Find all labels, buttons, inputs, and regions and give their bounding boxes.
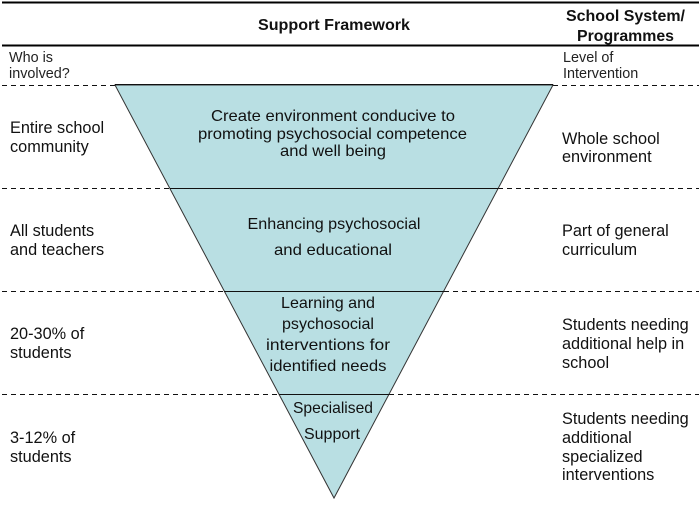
right label: Students needing additional specialized interventions: Students needing [562,410,689,428]
tier 1 text: promoting psychosocial competence [198,126,467,143]
column label: Level of Intervention [563,50,638,82]
right label: Students needing additional help in school: Students needing [562,316,689,334]
heading: School System/Programmes: School System/ [566,8,686,25]
tier 2 text: and educational [274,242,392,259]
tier 3 text [266,295,391,375]
tier 3 text: Learning and [281,295,375,312]
column label: Who is involved? [9,50,70,82]
tier 4 text [293,400,373,443]
column label: Who is involved?: Who is [9,50,53,66]
left label: All students and teachers [10,222,104,259]
right label: Part of general curriculum [562,222,669,259]
right label: Students needing additional specialized interventions [562,410,689,484]
left label: Entire school community [10,119,104,156]
column label: Who is involved?: involved? [9,66,70,82]
inverted triangle pyramid [115,84,553,498]
tier 1 text [198,108,467,160]
column label: Level of Intervention: Level of [563,50,614,66]
left label: 3-12% of students [10,429,76,466]
left label: Entire school community: community [10,138,90,156]
tier 1 text: Create environment conducive to [211,108,455,125]
tier 3 text: interventions for [266,337,391,354]
right label: Whole school environment: Whole school [562,130,660,148]
heading: School System/Programmes [566,8,686,45]
tier 1 text: and well being [280,143,386,160]
tier 4 text: Specialised [293,400,373,417]
right label: Students needing additional specialized interventions: interventions [562,466,654,484]
right label: Students needing additional help in school: additional help in [562,335,684,353]
right label: Part of general curriculum: curriculum [562,241,637,259]
right label: Students needing additional specialized interventions: additional [562,429,632,447]
left label: 20-30% of students: 20-30% of [10,325,85,343]
left label: 3-12% of students: students [10,448,72,466]
left label: 20-30% of students: students [10,344,72,362]
left label: Entire school community: Entire school [10,119,104,137]
tier 2 text: Enhancing psychosocial [248,216,420,233]
right label: Whole school environment: environment [562,148,652,166]
right label: Students needing additional help in school [562,316,689,372]
right label: Students needing additional help in school: school [562,354,609,372]
tier 3 text: identified needs [270,358,386,375]
column label: Level of Intervention: Intervention [563,66,638,82]
heading: Support Framework: Support Framework [258,17,410,34]
tier 4 text: Support [304,426,361,443]
left label: All students and teachers: All students [10,222,94,240]
tier 2 text [248,216,420,259]
heading: School System/Programmes: Programmes [577,28,674,45]
tier 3 text: psychosocial [282,316,374,333]
right label: Part of general curriculum: Part of general [562,222,669,240]
left label: All students and teachers: and teachers [10,241,104,259]
right label: Whole school environment [562,130,660,166]
left label: 20-30% of students [10,325,85,362]
right label: Students needing additional specialized interventions: specialized [562,448,643,466]
left label: 3-12% of students: 3-12% of [10,429,76,447]
